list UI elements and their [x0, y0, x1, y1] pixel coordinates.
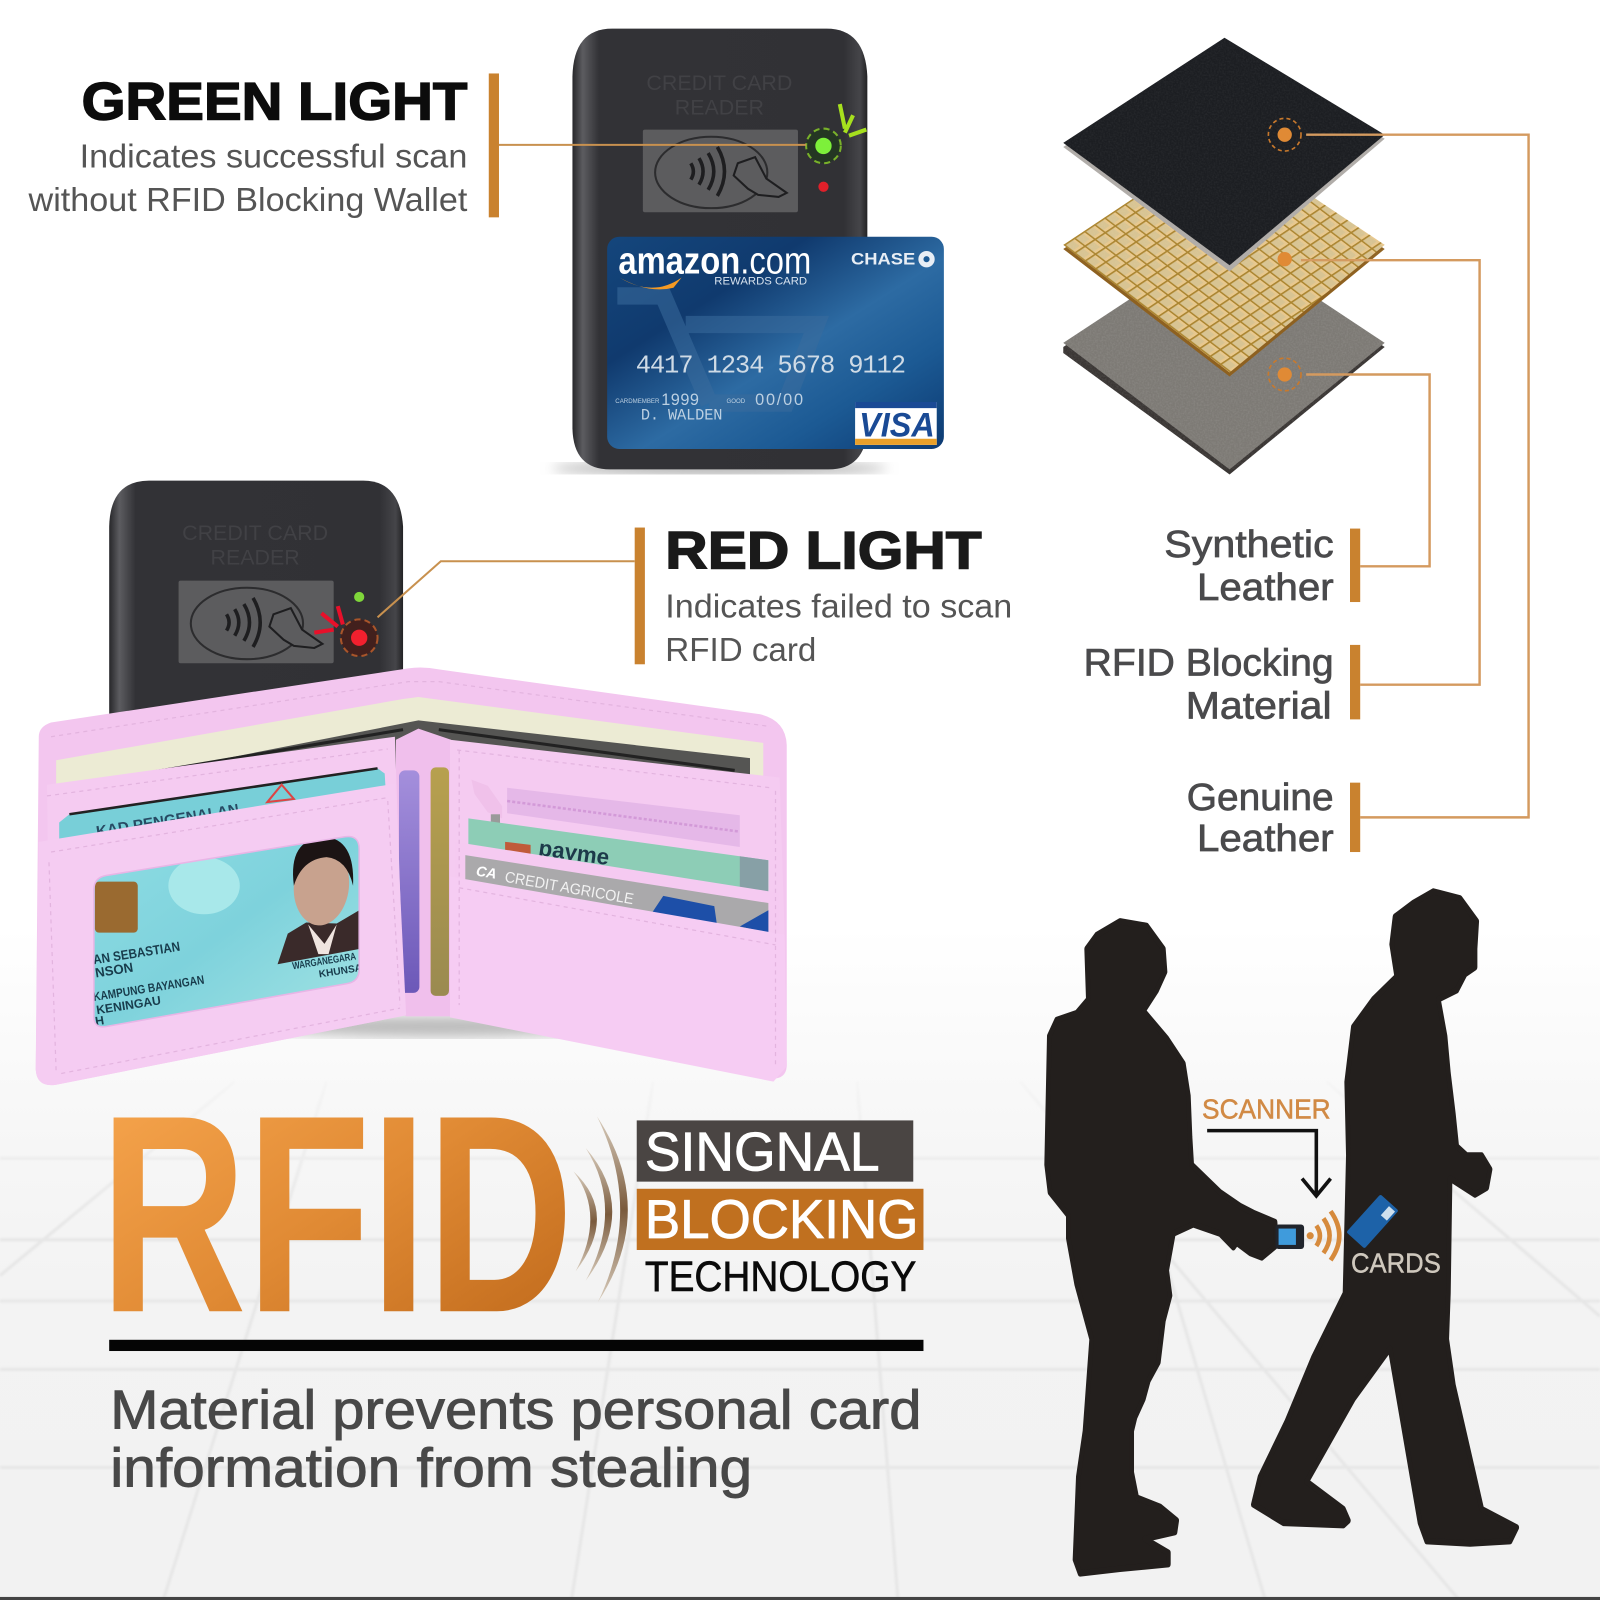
- chase logo: CHASE: [851, 250, 915, 268]
- label: scanner: SCANNER: [1202, 1093, 1331, 1124]
- label: rfid blocking material: RFID Blocking: [1084, 642, 1334, 684]
- layer: gold rfid blocking material: [1063, 138, 1385, 377]
- heading: green light: GREEN LIGHT: [82, 72, 467, 131]
- card reader: successful scan: CREDIT CARD: [646, 71, 792, 95]
- card reader: successful scan: [551, 29, 888, 473]
- text: rfid description: Material prevents personal card: [110, 1379, 921, 1441]
- amazon logo: amazon.com: [618, 239, 811, 281]
- icon: scanner waves: [1307, 1211, 1339, 1260]
- card reader: successful scan: READER: [675, 95, 764, 119]
- banknote: [56, 697, 763, 794]
- visa logo: VISA: [859, 407, 935, 445]
- wallet: [36, 668, 787, 1085]
- id card window: H: [94, 1013, 105, 1028]
- text: red light description: RFID card: [665, 632, 816, 669]
- icon: stolen card: [1346, 1194, 1399, 1249]
- arrow: to scanner: [1207, 1131, 1331, 1196]
- card details: 1999: [661, 391, 699, 409]
- divider rule: [109, 1340, 923, 1351]
- payme card: [468, 818, 768, 898]
- right front pocket: [450, 877, 787, 1082]
- card reader: failed scan: READER: [210, 545, 300, 569]
- icon: green indicator off: [354, 592, 364, 602]
- silhouette: walking person: [1253, 891, 1517, 1544]
- left back pocket: [47, 737, 404, 1061]
- cart watermark: [617, 296, 816, 403]
- teal card behind: KAD PENGENALAN: [95, 801, 240, 841]
- icon: handheld scanner: [1276, 1224, 1304, 1249]
- heading: green light: [28, 72, 468, 219]
- marker: middle layer: [1278, 252, 1292, 266]
- portrait: [278, 837, 359, 964]
- label: synthetic leather: [1164, 523, 1360, 608]
- label: synthetic leather: Synthetic: [1164, 523, 1334, 565]
- card details: 00/00: [755, 391, 803, 409]
- label: synthetic leather: Leather: [1197, 566, 1334, 608]
- id card window: WARGANEGARA: [292, 951, 357, 972]
- credit agricole card: CREDIT AGRICOLE: [503, 869, 635, 908]
- stitching: [47, 682, 776, 1073]
- zipper: [471, 780, 740, 855]
- right back panel: [450, 740, 785, 1016]
- label: cards: CARDS: [1351, 1247, 1441, 1278]
- spine with inner cards: [396, 729, 451, 1016]
- wallet back: [36, 668, 787, 1085]
- id card window: AN SEBASTIAN: [92, 939, 181, 967]
- callout bar and line: red light: [378, 528, 645, 664]
- badge: blocking: BLOCKING: [645, 1188, 918, 1250]
- icon: red indicator off: [818, 182, 829, 192]
- card details: CARDMEMBER: [615, 398, 660, 405]
- text: green light description: [28, 138, 468, 219]
- credit agricole card: [465, 855, 768, 935]
- text: red light description: Indicates failed to scan: [665, 588, 1012, 625]
- icon: green indicator light: [806, 104, 866, 163]
- heading: red light: RED LIGHT: [665, 521, 982, 580]
- credit agricole card: CA: [475, 864, 498, 883]
- icon: red indicator light: [314, 606, 378, 656]
- icon: contactless window: [179, 581, 334, 663]
- amazon logo: REWARDS CARD: [714, 276, 807, 288]
- credit card: [607, 237, 944, 449]
- text: green light description: without RFID Blocking Wallet: [28, 182, 468, 219]
- leader lines: layers: [1301, 135, 1529, 817]
- id card window: KAMPUNG BAYANGAN: [92, 973, 205, 1004]
- heading: red light: [665, 521, 1012, 669]
- icon: signal arcs: [573, 1116, 628, 1302]
- id card window: KHUNSA: [318, 963, 364, 981]
- card reader: failed scan: CREDIT CARD: [182, 521, 328, 545]
- text: rfid description: [110, 1379, 921, 1499]
- layer: grey genuine leather: [1063, 237, 1385, 474]
- card reader: failed scan: [109, 481, 403, 735]
- callout bar and line: green light: [489, 73, 806, 217]
- logo: RFID: RFID: [100, 1056, 573, 1371]
- chase logo: [851, 250, 935, 268]
- id card window: NSON: [94, 960, 134, 981]
- text: technology: TECHNOLOGY: [645, 1253, 916, 1301]
- teal card behind: [59, 768, 386, 841]
- pocket band: [455, 842, 779, 935]
- left front pocket: [36, 784, 406, 1085]
- icon: contactless window: [643, 130, 798, 212]
- card details: D. WALDEN: [641, 406, 722, 424]
- text: rfid description: information from stealing: [110, 1437, 752, 1499]
- id card window: KENINGAU: [95, 993, 162, 1017]
- card number: 4417 1234 5678 9112: [636, 351, 906, 380]
- layered materials: [1063, 38, 1385, 474]
- text: red light description: [665, 588, 1012, 669]
- silhouette: scanning person: [1047, 921, 1277, 1573]
- card details: GOOD: [727, 398, 746, 405]
- label: genuine leather: Genuine: [1187, 776, 1334, 818]
- label: genuine leather: [1187, 776, 1360, 859]
- text: green light description: Indicates successful scan: [80, 138, 467, 175]
- badge: singnal: SINGNAL: [645, 1120, 880, 1182]
- label: genuine leather: Leather: [1197, 817, 1334, 859]
- label: rfid blocking material: [1084, 642, 1360, 726]
- id card window: [93, 836, 360, 1028]
- card details: [615, 391, 803, 424]
- marker: bottom layer: [1268, 358, 1301, 391]
- payme card: payme: [537, 835, 611, 870]
- marker: top layer: [1268, 118, 1301, 151]
- label: rfid blocking material: Material: [1186, 684, 1332, 726]
- layer: black synthetic leather: [1063, 38, 1385, 271]
